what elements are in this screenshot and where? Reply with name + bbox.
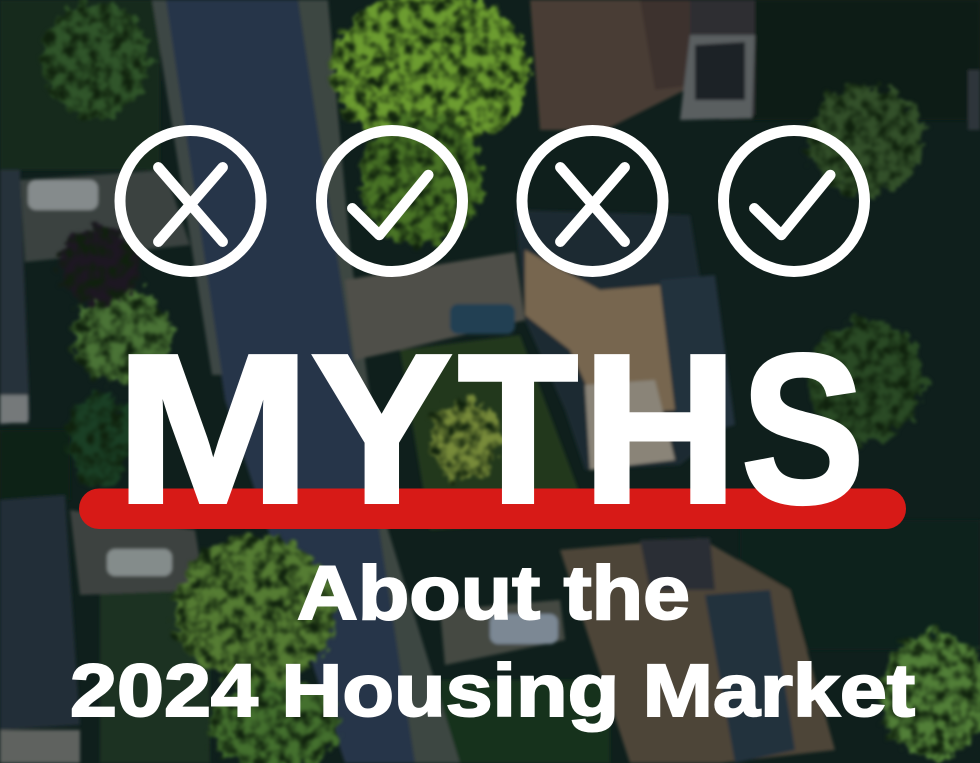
driveways xyxy=(20,170,565,665)
icon: check in circle xyxy=(724,130,864,272)
title: MYTHS: H xyxy=(582,311,738,548)
red underline bar xyxy=(79,488,906,529)
road xyxy=(165,0,415,763)
icon: X in circle xyxy=(120,130,261,272)
title: MYTHS: M xyxy=(115,311,311,547)
icon: X in circle xyxy=(522,130,663,272)
title: MYTHS: S xyxy=(741,311,864,548)
cars xyxy=(28,180,558,644)
title: MYTHS: T xyxy=(458,311,578,548)
title: MYTHS xyxy=(115,310,864,548)
subtitle line: About the: About the xyxy=(297,551,690,636)
subtitle line: 2024 Housing Market: 2024 Housing Market xyxy=(70,649,915,732)
icon: check in circle xyxy=(322,130,462,272)
title: MYTHS: Y xyxy=(311,310,452,547)
